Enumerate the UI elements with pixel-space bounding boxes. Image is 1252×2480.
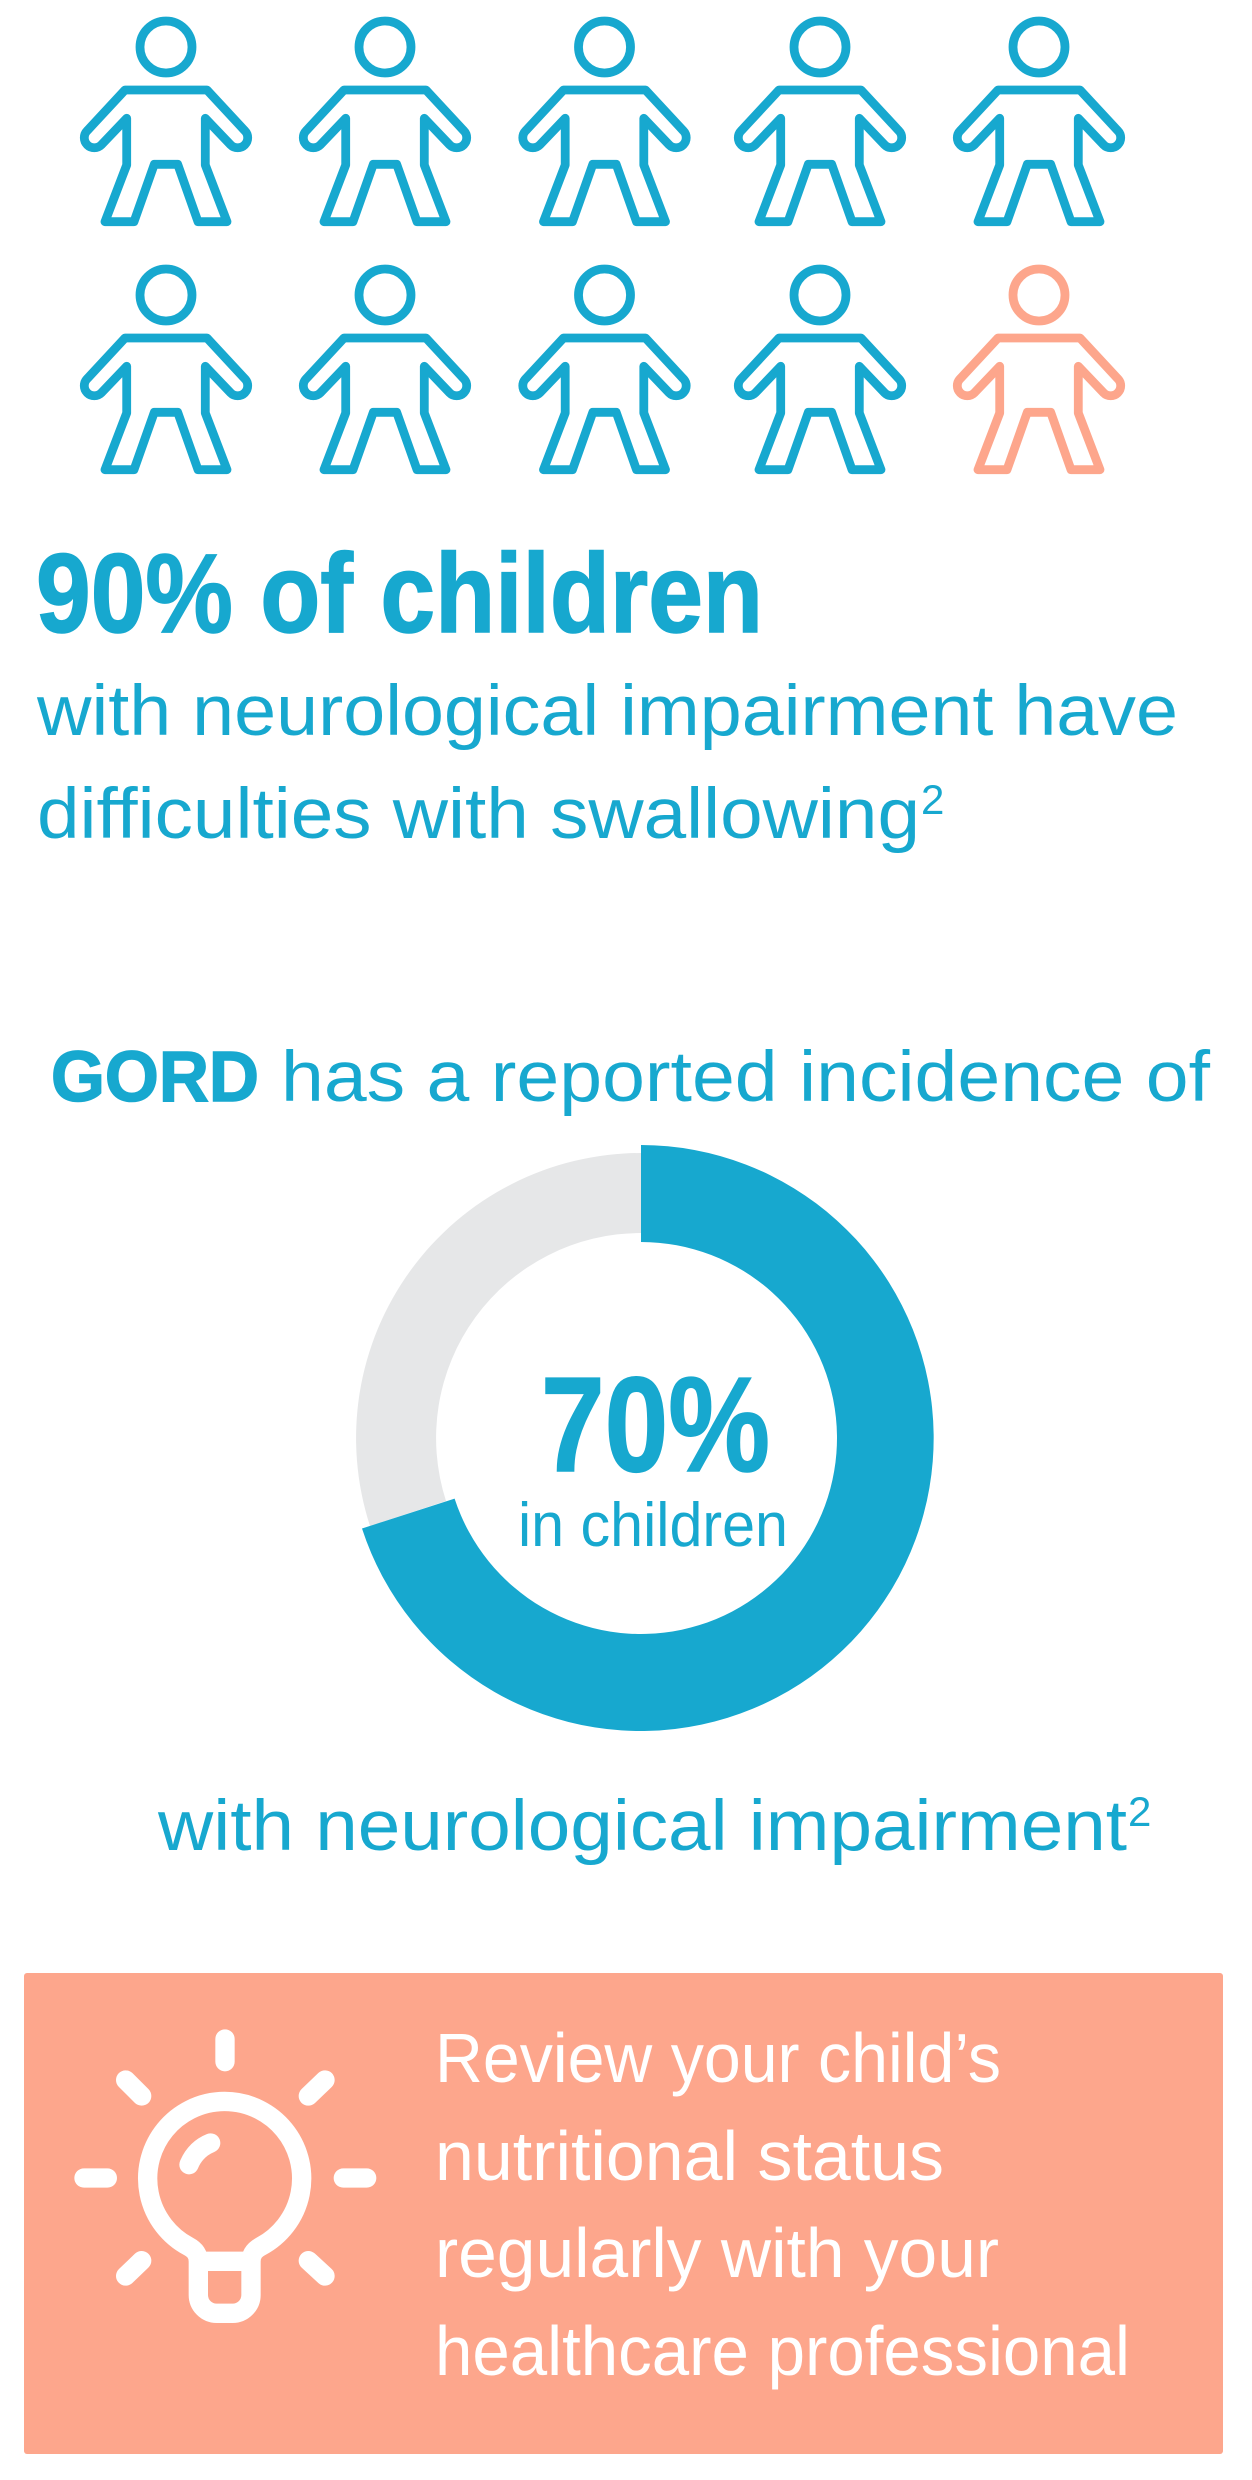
icon: child 7: [303, 269, 467, 470]
donut segment 70% blue: [362, 1145, 934, 1731]
icon: child 2: [303, 21, 467, 222]
value: 70%: 70%: [541, 1349, 770, 1500]
text block: review advice: healthcare professional: [435, 2312, 1130, 2390]
text block: review advice: [435, 2019, 1130, 2390]
icon: child 10 coral: [957, 269, 1121, 470]
pictogram: ten children, nine blue and one coral: [84, 21, 1121, 470]
icon: child 6: [84, 269, 248, 470]
icon: child 8: [523, 269, 686, 470]
icon: child 4: [738, 21, 902, 222]
icon: lightbulb: [84, 2039, 367, 2313]
icon: child 1: [84, 21, 248, 222]
label: in children: in children: [518, 1491, 788, 1560]
donut chart: 70%: [356, 1145, 934, 1731]
text block: review advice: nutritional status: [435, 2117, 944, 2195]
text block: swallowing statement: difficulties with swallowing: [37, 775, 920, 854]
text block: swallowing statement: with neurological impairment have: [36, 672, 1178, 751]
donut remainder 30% grey: [356, 1153, 641, 1526]
text block: swallowing statement: [36, 672, 1178, 854]
heading: GORD incidence: GORD: [51, 1038, 259, 1117]
text block: with neurological impairment: with neurological impairment: [157, 1787, 1127, 1866]
text block: with neurological impairment: 2: [1128, 1788, 1151, 1835]
heading: GORD incidence: has a reported incidence of: [281, 1038, 1210, 1117]
heading: 90% of children: 90% of children: [36, 531, 763, 656]
text block: swallowing statement: 2: [921, 776, 944, 823]
icon: child 3: [523, 21, 686, 222]
icon: child 5: [957, 21, 1121, 222]
text block: review advice: regularly with your: [435, 2214, 999, 2292]
panel: nutritional review callout: [24, 1973, 1223, 2454]
text block: review advice: Review your child’s: [435, 2019, 1001, 2097]
icon: child 9: [738, 269, 902, 470]
